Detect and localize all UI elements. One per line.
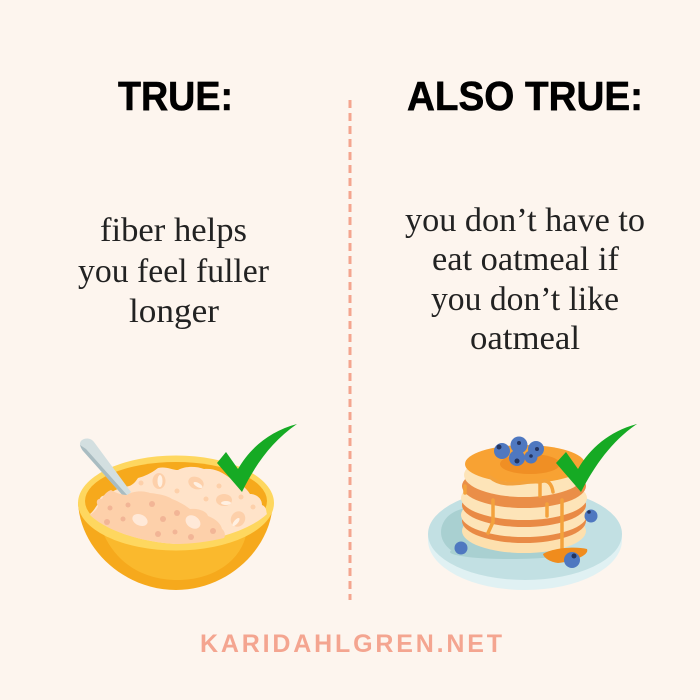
text block: oatmeal statement <box>405 202 645 357</box>
syrup drips <box>465 477 562 548</box>
spoon <box>80 438 131 498</box>
text block: oatmeal statement: you don’t have to <box>405 202 645 239</box>
oatmeal light part <box>90 467 267 544</box>
oatmeal dark part <box>90 490 225 544</box>
oat flakes <box>138 473 256 529</box>
footer website: KARIDAHLGREN.NET <box>200 630 502 658</box>
icon: check mark on pancakes <box>556 424 637 492</box>
blueberries <box>454 436 598 568</box>
icon: pancakes on a plate <box>428 436 622 590</box>
pancake stack <box>462 509 586 553</box>
text block: oatmeal statement: eat oatmeal if <box>432 241 620 278</box>
center dashed divider <box>348 100 352 600</box>
text block: fiber statement: fiber helps <box>100 212 247 249</box>
text block: oatmeal statement: oatmeal <box>470 320 580 357</box>
heading: also true: ALSO TRUE: <box>407 73 643 119</box>
icon: oatmeal bowl <box>78 438 274 590</box>
text block: fiber statement <box>78 212 270 330</box>
icon: check mark on bowl <box>217 424 297 492</box>
heading: true: TRUE: <box>118 73 233 119</box>
syrup puddle <box>543 548 587 563</box>
text block: fiber statement: longer <box>129 293 220 330</box>
plate <box>428 490 622 590</box>
text block: oatmeal statement: you don’t like <box>431 281 619 318</box>
text block: fiber statement: you feel fuller <box>78 253 270 290</box>
